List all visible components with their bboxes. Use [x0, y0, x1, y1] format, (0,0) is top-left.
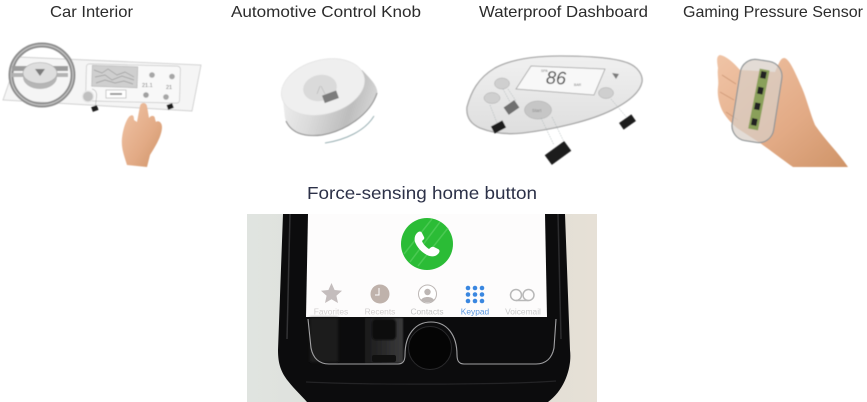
steering wheel	[11, 45, 73, 105]
knob base and wall	[283, 70, 377, 136]
phone case	[278, 214, 570, 402]
transparent capsule	[730, 57, 784, 145]
tab: Contacts: Contacts	[410, 306, 444, 316]
dashboard panel	[3, 57, 201, 111]
tab: Favorites: Favorites	[314, 306, 348, 316]
tab: Keypad	[461, 286, 490, 316]
rotation arrow	[325, 116, 374, 143]
sensor chips	[504, 100, 519, 115]
hand	[717, 55, 848, 167]
illustration: control knob	[275, 50, 377, 143]
hand pressing	[122, 103, 162, 167]
heading: Gaming Pressure Sensor: Gaming Pressure Sensor	[683, 4, 863, 21]
photo: phone home button	[247, 214, 597, 402]
call button	[401, 218, 453, 270]
leader lines	[490, 89, 628, 145]
tab: Voicemail	[505, 290, 541, 316]
tab: Favorites	[314, 283, 348, 316]
home button	[408, 326, 452, 370]
dashboard body	[467, 56, 642, 134]
sensor chip	[322, 91, 339, 103]
tab: Voicemail: Voicemail	[505, 306, 541, 316]
lcd screen	[516, 66, 605, 95]
buttons	[494, 78, 510, 89]
lcd screen: BAR	[574, 83, 582, 87]
tab: Contacts	[410, 285, 444, 316]
round control	[82, 91, 94, 102]
heading: Automotive Control Knob: Automotive Control Knob	[231, 4, 421, 21]
sensor chips	[91, 105, 99, 112]
illustration: gaming pressure sensor	[717, 55, 848, 167]
lcd screen: 86	[545, 68, 568, 89]
central display	[86, 64, 180, 103]
glass reflection	[310, 318, 403, 363]
logo mark	[612, 73, 619, 79]
heading: Waterproof Dashboard: Waterproof Dashboard	[479, 4, 648, 21]
tab: Recents: Recents	[365, 306, 395, 316]
illustration: car interior dashboard	[3, 45, 201, 167]
central display: 21.1	[142, 83, 153, 89]
heading: Car Interior: Car Interior	[50, 4, 133, 21]
tab: Recents	[365, 284, 395, 316]
phone screen	[306, 214, 547, 317]
tab: Keypad: Keypad	[461, 306, 490, 316]
green sensor strip	[748, 69, 770, 130]
illustration: waterproof dashboard: Start	[532, 108, 542, 113]
center disc	[301, 72, 339, 104]
illustration: waterproof dashboard	[467, 56, 642, 165]
glass edge around home button	[308, 319, 556, 364]
central display: 21	[166, 85, 172, 91]
photo background	[247, 214, 597, 402]
knob top face	[275, 50, 371, 124]
heading: Force-sensing home button: Force-sensing home button	[307, 183, 537, 203]
lcd screen: SPA	[541, 69, 548, 73]
